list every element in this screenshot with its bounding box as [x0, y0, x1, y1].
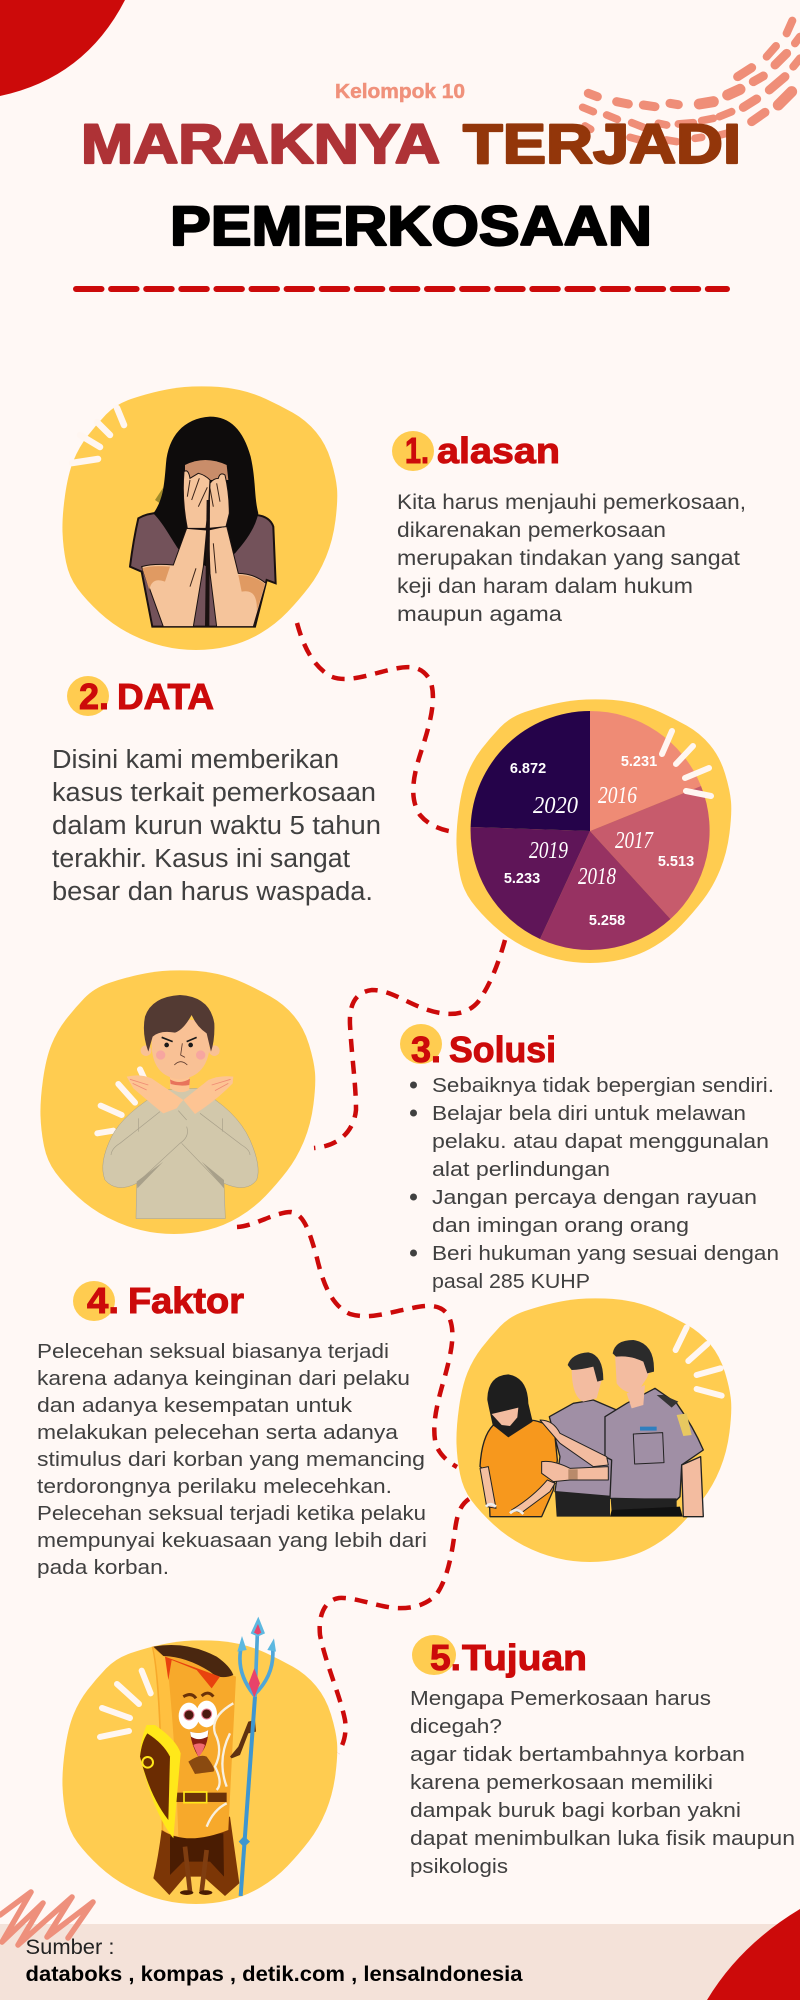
text block: section 1: maupun agama — [397, 602, 562, 626]
illustration: woman covering face — [130, 417, 276, 627]
panel: section 4 heading: 4. — [87, 1280, 119, 1321]
title: MARAKNYA — [81, 112, 440, 175]
text block: section 4: melakukan pelecehan serta adanya — [37, 1421, 399, 1444]
chart: pie chart of cases per year: 5.513 — [658, 854, 694, 870]
chart: pie chart of cases per year: 2019 — [529, 838, 568, 864]
chart: pie chart of cases per year: 2017 — [615, 828, 654, 854]
illustration: police arresting suspect — [480, 1327, 722, 1517]
text block: section 3 list: Jangan percaya dengan rayuan — [432, 1186, 757, 1209]
panel: section 5 heading: Tujuan — [462, 1637, 587, 1678]
panel: section 5 heading: 5. — [430, 1637, 461, 1678]
panel: section 3 heading: 3. — [411, 1029, 441, 1070]
panel: section 1 heading — [392, 430, 560, 471]
text block: section 5: dapat menimbulkan luka fisik maupun — [410, 1827, 795, 1850]
panel: section 2 heading — [67, 676, 214, 717]
text block: section 3 list: Belajar bela diri untuk melawan — [432, 1102, 746, 1125]
text block: section 4: pada korban. — [37, 1556, 169, 1579]
title underline — [76, 286, 727, 292]
arrow: dashed trail 2 to 3 — [314, 940, 505, 1148]
blob: section 3 — [40, 970, 315, 1234]
text block: section 5: Mengapa Pemerkosaan harus — [410, 1687, 711, 1710]
text block: section 3 list: dan imingan orang orang — [432, 1214, 689, 1237]
text block: section 3 list: Beri hukuman yang sesuai dengan — [432, 1242, 779, 1265]
illustration: man crossing arms — [97, 995, 258, 1219]
title: PEMERKOSAAN — [170, 194, 652, 257]
text block: section 3 list — [410, 1074, 779, 1293]
icon: rays on pie — [662, 731, 711, 796]
panel: section 3 heading: Solusi — [449, 1029, 556, 1070]
decoration: red corner bottom right — [707, 1909, 800, 2000]
panel: section 4 heading: Faktor — [128, 1280, 244, 1321]
text block: section 3 list: alat perlindungan — [432, 1158, 610, 1181]
blob: section 5 — [62, 1640, 337, 1904]
text block: section 4: terdorongnya perilaku melecehkan. — [37, 1475, 392, 1498]
text block: section 1: dikarenakan pemerkosaan — [397, 518, 666, 542]
decoration: salmon scribble — [0, 1892, 93, 1945]
text block: sources — [26, 1936, 523, 1986]
chart: pie chart of cases per year: 2016 — [598, 783, 637, 809]
subtitle: Kelompok 10: Kelompok 10 — [335, 81, 465, 103]
text block: section 4: Pelecehan seksual biasanya terjadi — [37, 1340, 389, 1363]
text block: section 2: besar dan harus waspada. — [52, 878, 373, 906]
text block: section 5 — [410, 1687, 795, 1878]
text block: section 4: dan adanya kesempatan untuk — [37, 1394, 353, 1417]
icon: rays section 1 — [72, 408, 124, 463]
illustration: burrito warrior with trident — [100, 1617, 276, 1896]
text block: section 1: merupakan tindakan yang sangat — [397, 546, 740, 570]
chart: pie chart of cases per year: 2020 — [533, 793, 578, 819]
chart: pie chart of cases per year: 6.872 — [510, 761, 546, 777]
chart: pie chart of cases per year — [471, 711, 710, 950]
chart: pie chart of cases per year: 5.258 — [589, 913, 625, 929]
chart: pie chart of cases per year: 5.233 — [504, 871, 540, 887]
chart: pie chart of cases per year: 5.231 — [621, 754, 657, 770]
title: TERJADI — [463, 112, 741, 175]
decoration: red corner top left — [0, 0, 125, 96]
text block: section 4: stimulus dari korban yang memancing — [37, 1448, 425, 1471]
panel: section 2 heading: DATA — [117, 676, 214, 717]
text block: section 5: dampak buruk bagi korban yakni — [410, 1799, 741, 1822]
decoration: salmon dash arcs top right — [583, 21, 800, 142]
text block: section 1: Kita harus menjauhi pemerkosaan, — [397, 490, 746, 514]
panel: section 1 heading: 1. — [405, 430, 429, 471]
panel: section 4 heading — [73, 1280, 244, 1321]
text block: section 2: terakhir. Kasus ini sangat — [52, 845, 350, 873]
text block: section 2: Disini kami memberikan — [52, 746, 339, 774]
text block: section 2 — [52, 746, 381, 906]
chart: pie chart of cases per year: 2018 — [578, 864, 616, 890]
arrow: dashed trail 3 to 4 — [237, 1212, 457, 1467]
text block: section 4 — [37, 1340, 427, 1579]
text block: section 3 list: pelaku. atau dapat menggunalan — [432, 1130, 769, 1153]
text block: section 1: keji dan haram dalam hukum — [397, 574, 693, 598]
text block: section 5: karena pemerkosaan memiliki — [410, 1771, 713, 1794]
text block: section 4: mempunyai kekuasaan yang lebih dari — [37, 1529, 427, 1552]
panel: section 2 heading: 2. — [79, 676, 109, 717]
text block: section 5: psikologis — [410, 1855, 508, 1878]
text block: section 5: agar tidak bertambahnya korban — [410, 1743, 745, 1766]
text block: sources: Sumber : — [26, 1936, 114, 1959]
text block: section 5: dicegah? — [410, 1715, 502, 1738]
text block: section 4: Pelecehan seksual terjadi ketika pelaku — [37, 1502, 426, 1525]
footer band — [0, 1924, 800, 2000]
arrow: dashed trail 4 to 5 — [320, 1499, 469, 1753]
text block: section 1 — [397, 490, 746, 626]
blob: section 4 — [456, 1298, 731, 1562]
text block: section 2: dalam kurun waktu 5 tahun — [52, 812, 381, 840]
blob: section 1 — [62, 386, 337, 650]
text block: sources: databoks , kompas , detik.com , lensaIndonesia — [26, 1963, 523, 1986]
text block: section 4: karena adanya keinginan dari pelaku — [37, 1367, 410, 1390]
panel: section 5 heading — [412, 1635, 587, 1678]
panel: section 3 heading — [400, 1024, 556, 1070]
panel: section 1 heading: alasan — [437, 430, 560, 471]
text block: section 3 list: pasal 285 KUHP — [432, 1270, 590, 1293]
blob: pie backdrop — [456, 699, 731, 963]
text block: section 3 list: Sebaiknya tidak bepergian sendiri. — [432, 1074, 774, 1097]
arrow: dashed trail 1 to 2 — [297, 623, 455, 832]
title — [81, 112, 741, 257]
text block: section 2: kasus terkait pemerkosaan — [52, 779, 376, 807]
